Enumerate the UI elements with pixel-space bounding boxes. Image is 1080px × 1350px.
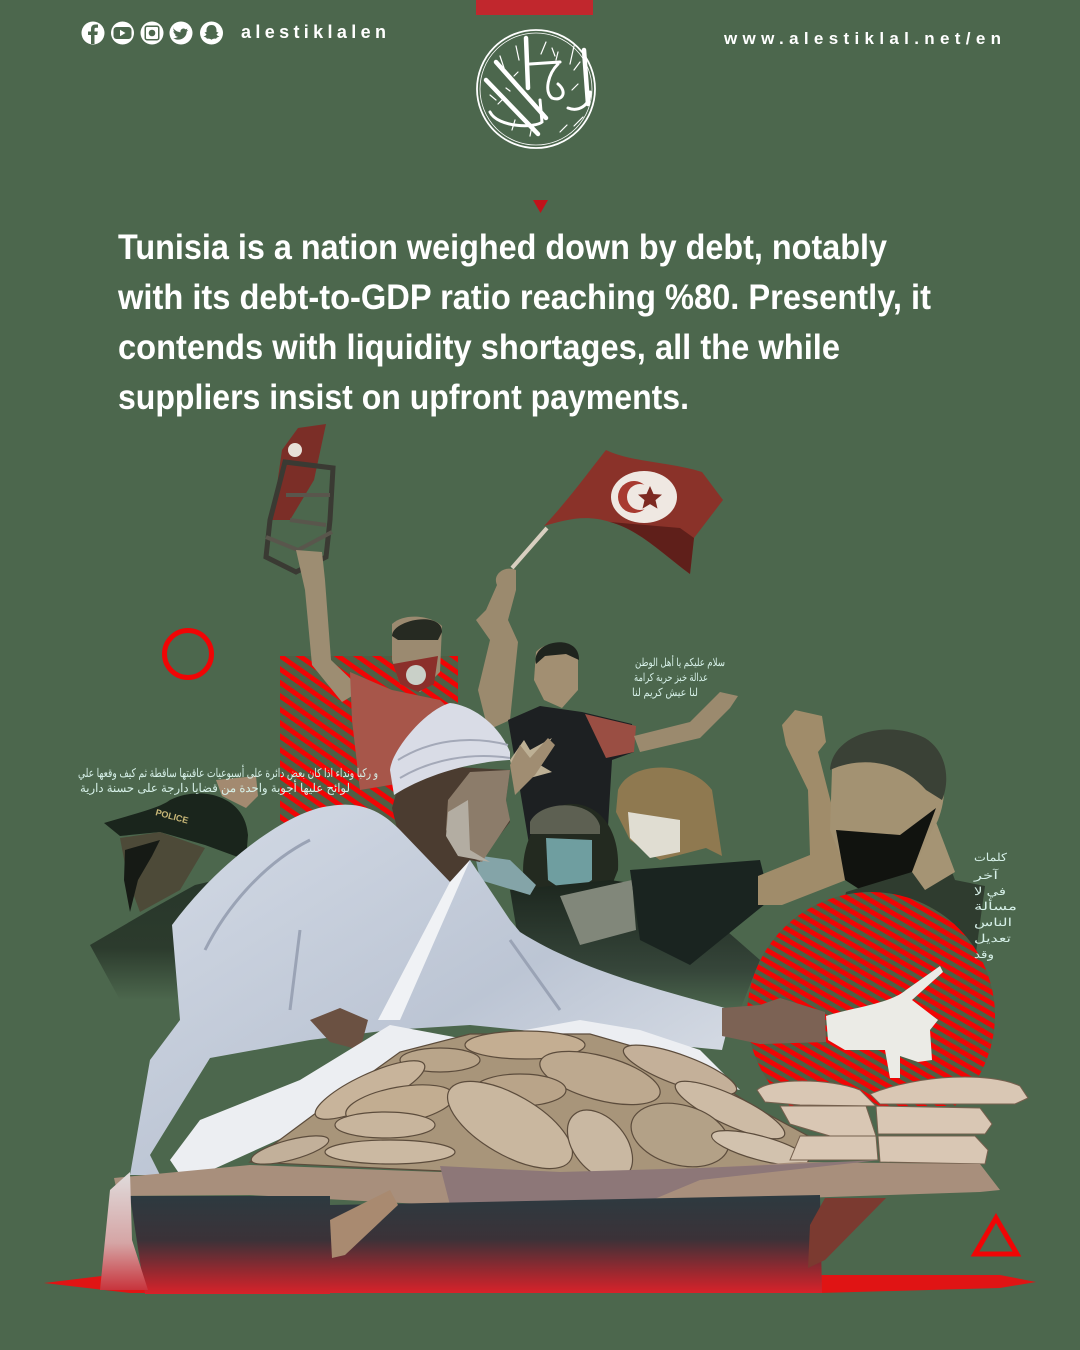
headline text: contends with liquidity shortages, all the while bbox=[118, 328, 840, 367]
arabic script fragment left: لوائح عليها أجوبة واحدة من قضايا دارجة على حسنة دارية bbox=[80, 780, 350, 795]
illustration: table bbox=[100, 1160, 1000, 1294]
headline text: with its debt-to-GDP ratio reaching %80. Presently, it bbox=[117, 278, 931, 317]
arabic script fragment right: الناس bbox=[974, 917, 1012, 929]
illustration: man with black mask and raised fist bbox=[758, 710, 985, 960]
arabic script fragment top right: سلام عليكم يا أهل الوطن bbox=[635, 655, 725, 669]
illustration: policeman bbox=[90, 793, 260, 1000]
icon: instagram bbox=[140, 22, 164, 44]
small red marker bbox=[533, 200, 548, 213]
headline text bbox=[117, 228, 931, 417]
headline text: suppliers insist on upfront payments. bbox=[118, 378, 689, 417]
headline text: Tunisia is a nation weighed down by debt, notably bbox=[118, 228, 887, 267]
arabic script fragment left bbox=[78, 765, 378, 795]
striped rectangle bbox=[280, 656, 458, 831]
arabic script fragment top right: لنا عيش كريم لنا bbox=[632, 687, 698, 699]
red top tab bbox=[476, 0, 593, 15]
illustration: bread pile bbox=[249, 1031, 825, 1192]
arabic script fragment right: وقد bbox=[974, 949, 994, 961]
red ring bbox=[164, 630, 212, 678]
icon: twitter bbox=[170, 22, 192, 44]
icon: snapchat bbox=[200, 22, 223, 44]
illustration: protester with cage and small flag bbox=[266, 424, 462, 790]
arabic script fragment right: مسألة bbox=[974, 899, 1017, 913]
arabic script fragment right: في لا bbox=[974, 886, 1006, 898]
arabic script fragment right: آخر bbox=[972, 869, 999, 882]
illustration: Tunisian flag bbox=[512, 450, 723, 574]
arabic script fragment top right: عدالة خبز حرية كرامة bbox=[634, 672, 708, 684]
illustration: flat bread stacks right bbox=[757, 1077, 1028, 1164]
website url: www.alestiklal.net/en bbox=[723, 29, 1001, 48]
red triangle bbox=[975, 1218, 1017, 1254]
logo bbox=[477, 30, 595, 148]
social icons bbox=[82, 22, 223, 44]
illustration: bread seller bbox=[130, 703, 943, 1182]
illustration: policeman: POLICE bbox=[154, 807, 189, 826]
illustration: masked crowd bbox=[475, 768, 770, 1010]
illustration: central protester bbox=[476, 569, 738, 870]
arabic script fragment right: تعديل bbox=[974, 933, 1011, 945]
social handle: alestiklalen bbox=[241, 22, 386, 42]
icon: facebook bbox=[82, 22, 104, 44]
illustration: raised fist near cap bbox=[216, 776, 258, 808]
arabic script fragment right bbox=[972, 852, 1017, 961]
icon: youtube bbox=[111, 22, 134, 44]
striped circle bbox=[747, 892, 995, 1106]
red ground sliver bbox=[44, 1275, 1036, 1293]
arabic script fragment top right bbox=[632, 655, 725, 699]
arabic script fragment left: و ركبا ونداء اذا كان بعض دائرة على أسبوعيات عاقبتها ساقطة ثم كيف وقعها علي bbox=[78, 765, 378, 780]
arabic script fragment right: كلمات bbox=[974, 852, 1008, 864]
